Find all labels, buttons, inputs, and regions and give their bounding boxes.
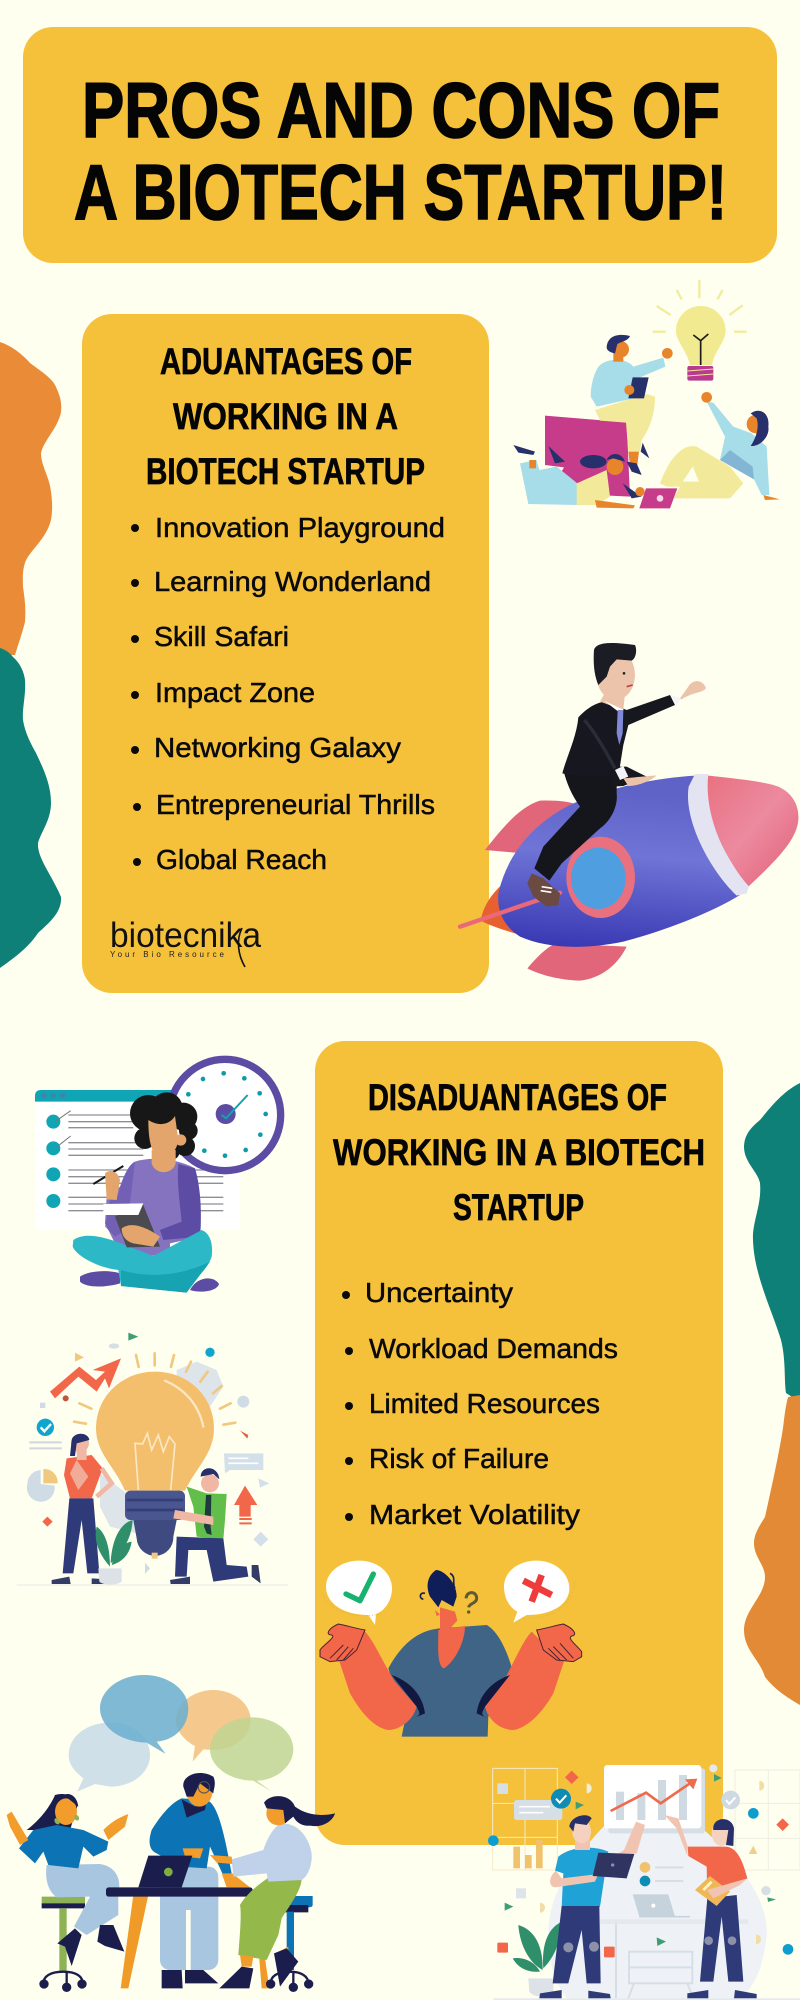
- chart board: [604, 1765, 705, 1833]
- list: disadvantages: Market Volatility: [369, 1499, 580, 1530]
- right woman: [210, 1796, 335, 1992]
- panel: advantages: [82, 314, 489, 993]
- illustration: light bulb with two people: [17, 1333, 288, 1586]
- table: [106, 1867, 269, 1988]
- illustration: team discussion around table: [7, 1675, 335, 1992]
- heading: advantages: BIOTECH STARTUP: [146, 451, 425, 492]
- left arm: [338, 1632, 417, 1730]
- list: disadvantages: [342, 1277, 618, 1530]
- kneeling man: [170, 1468, 261, 1584]
- title panel: [23, 27, 777, 263]
- man with laptop: [539, 1815, 645, 1998]
- heading: disadvantages: DISADUANTAGES OF: [368, 1077, 667, 1118]
- illustration: woman with checklist and clock: [35, 1059, 281, 1293]
- businessman: [527, 643, 706, 907]
- plant: [96, 1520, 133, 1585]
- heading: disadvantages: WORKING IN A BIOTECH: [333, 1132, 705, 1173]
- panel: disadvantages: [315, 1041, 723, 1845]
- desk: [600, 1862, 748, 1998]
- illustration: team with light bulb: [513, 280, 780, 508]
- bulb: [96, 1372, 214, 1556]
- woman with folder: [664, 1815, 757, 1998]
- list: advantages: Impact Zone: [155, 677, 315, 708]
- decorative blob: right teal: [744, 1083, 800, 1402]
- heading: disadvantages: STARTUP: [453, 1187, 584, 1228]
- illustration: businessman on rocket: [460, 643, 798, 981]
- speech bubble: check: [326, 1561, 392, 1625]
- list: advantages: Entrepreneurial Thrills: [156, 789, 435, 820]
- decorative blob: right orange: [744, 1395, 800, 1705]
- heading: disadvantages: [333, 1077, 705, 1228]
- decorative blob: left teal: [0, 648, 61, 968]
- rocket body: [498, 776, 740, 947]
- heading: advantages: WORKING IN A: [173, 396, 398, 437]
- list: disadvantages: Uncertainty: [365, 1277, 513, 1308]
- logo: biotecnika: Your Bio Resource: [110, 950, 225, 959]
- speech bubbles: [69, 1675, 293, 1792]
- logo: biotecnika: biotecnika: [110, 916, 262, 955]
- right arm: [485, 1632, 565, 1730]
- plant: [513, 1923, 560, 1997]
- illustration: two people with growth chart: [488, 1764, 800, 2000]
- speech bubble: cross: [504, 1561, 569, 1623]
- woman in orange: [52, 1434, 112, 1584]
- heading: advantages: ADUANTAGES OF: [160, 341, 412, 382]
- list: advantages: Networking Galaxy: [154, 732, 401, 763]
- left woman: [7, 1794, 128, 1992]
- list: advantages: [131, 512, 445, 875]
- list: disadvantages: Workload Demands: [369, 1333, 618, 1364]
- list: disadvantages: Limited Resources: [369, 1388, 600, 1419]
- list: advantages: Innovation Playground: [155, 512, 445, 543]
- illustration: person with check and cross bubbles: [320, 1561, 582, 1737]
- seated woman: [73, 1092, 219, 1293]
- heading: advantages: [146, 341, 425, 492]
- decorative blob: left orange: [0, 342, 61, 655]
- person: [320, 1570, 582, 1737]
- list: advantages: Global Reach: [156, 844, 327, 875]
- rocket fins: [485, 801, 627, 981]
- title: [74, 66, 727, 236]
- centre man: [138, 1773, 250, 1887]
- list: disadvantages: Risk of Failure: [369, 1443, 549, 1474]
- list: advantages: Learning Wonderland: [154, 566, 431, 597]
- list: advantages: Skill Safari: [154, 621, 289, 652]
- clock: [169, 1059, 281, 1171]
